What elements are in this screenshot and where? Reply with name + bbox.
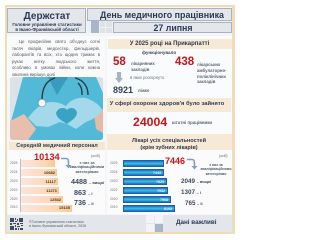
stat: staff: [133, 115, 212, 129]
header: Derzhstat logo box: [7, 8, 86, 33]
footer: [7, 215, 232, 232]
bar chart: 2022: [10, 188, 18, 192]
photo: medic making heart with hands: [10, 77, 103, 140]
date banner: [113, 22, 232, 33]
stat: 438 clinics: закладів: [197, 79, 215, 84]
heading: in 2025: У 2025 році на Прикарпатті: [130, 41, 209, 47]
panel: intro text: [7, 36, 105, 78]
copyright text: в Івано-Франківській області, 2026: [29, 224, 86, 228]
stat: second: 736 – ІІ: [74, 198, 94, 207]
heading: employment: У сфері охорони здоров'я було зайнято: [110, 101, 224, 107]
arrow: [187, 158, 198, 170]
bar chart: 7825: [156, 180, 164, 184]
text: department: Головне управління статистики: [12, 22, 82, 27]
heading: mid-level staff: Середній медичний персонал: [16, 142, 98, 148]
bar chart: 11117: [46, 178, 56, 184]
decorative grid squares bottom: [146, 215, 154, 222]
bar chart: 7443: [153, 171, 161, 175]
total number: 10134: [34, 152, 60, 162]
heading: mid-level staff: [9, 142, 105, 150]
stat: 438 clinics: [175, 56, 227, 84]
qualification note: [200, 162, 232, 176]
panel: facilities: [107, 36, 232, 136]
panel: doctors chart: [107, 150, 232, 214]
qualification note: категоріями: [206, 172, 226, 176]
stat: 58 hospitals: лікарняних: [131, 61, 155, 66]
outer frame: [5, 5, 235, 234]
stat: 438 clinics: 438: [175, 56, 194, 68]
text block: intro: особливо в умовах війни, коли кожна: [12, 65, 100, 70]
bar chart: 10682: [44, 170, 55, 174]
bar chart: 2025: [10, 161, 18, 165]
stat: beds: ліжко: [138, 88, 149, 92]
title: День медичного працівника: [100, 10, 224, 20]
stat: 438 clinics: поліклінічних: [197, 74, 226, 79]
text block: intro: [12, 39, 100, 77]
title banner: [87, 8, 232, 21]
year labels: 2010: [110, 205, 118, 209]
bar chart: 2023: [10, 179, 18, 183]
total number: 7446: [165, 156, 185, 166]
stat: first: 863 – І: [74, 188, 92, 197]
stat: 58 hospitals: 58: [113, 56, 126, 68]
qualification note: з них за: [209, 162, 223, 166]
stat: 58 hospitals: закладів: [131, 67, 149, 72]
year labels: [110, 161, 118, 209]
qualification note: категоріями: [75, 169, 99, 174]
subheading: функціонувало: [142, 50, 176, 55]
qualification note: кваліфікаційними: [200, 167, 232, 171]
bar chart: 2024: [10, 170, 18, 174]
bar chart: 8193: [164, 207, 172, 211]
stat: beds: 8921: [113, 84, 133, 94]
stat: 438 clinics: лікарських: [197, 62, 220, 67]
unit note: (осіб): [91, 154, 100, 158]
stat: second: 765 – ІІ: [185, 200, 203, 207]
heading: doctors: [107, 134, 232, 150]
decorative grid squares top: [87, 21, 232, 33]
year labels: 2024: [110, 170, 118, 174]
heading: in 2025: [108, 39, 232, 49]
icon: QR code: [10, 218, 23, 230]
arrow: [61, 158, 72, 168]
heading: doctors: (крім зубних лікарів): [140, 144, 198, 150]
stat: highest: 4488 – вищої: [71, 177, 104, 186]
stat: staff: штатні працівники: [172, 120, 212, 125]
unit note: (осіб): [219, 154, 228, 158]
year labels: 2020: [110, 197, 118, 201]
text block: intro: руках нитку людського життя,: [12, 58, 100, 64]
stat: highest: 2049 – вищої: [181, 178, 211, 185]
closing phrase: Дані важливі: [176, 219, 217, 226]
bar chart: 2020: [10, 197, 18, 201]
text block: intro: тисяч лікарів, медсестер, фельдшерів,: [12, 46, 100, 50]
bar chart: 11271: [46, 188, 57, 192]
bar chart: 15135: [59, 205, 70, 210]
stat: 438 clinics: амбулаторно-: [197, 68, 227, 73]
bar chart: 2010: [10, 205, 18, 209]
heading: doctors: Лікарі усіх спеціальностей: [132, 138, 206, 144]
copyright text: ©Головне управління статистики: [29, 220, 84, 224]
arrow down: [115, 72, 123, 83]
year labels: 2023: [110, 179, 118, 183]
stat: staff: 24004: [133, 115, 167, 129]
heading: employment: [107, 98, 231, 112]
year labels: 2022: [110, 188, 118, 192]
text block: intro: лаборантів та всіх, хто щодня тримає в: [12, 52, 100, 57]
stat: 58 hospitals: [113, 56, 155, 72]
note: in them: в яких розгорнуто: [130, 75, 164, 80]
heading: organisation: Держстат: [24, 11, 70, 22]
qualification note: кваліфікаційними: [70, 164, 104, 169]
stat: first: 1307 – І: [181, 189, 201, 196]
year labels: 2025: [110, 161, 118, 165]
panel: mid-level staff chart: [8, 150, 105, 214]
bar chart: [10, 159, 72, 212]
text: department: [12, 22, 82, 32]
qualification note: з них за: [79, 160, 95, 164]
text: department: в Івано-Франківській області: [15, 27, 79, 32]
copyright text: [29, 220, 86, 228]
text block: intro: хвилина вирішує долі: [12, 72, 55, 76]
date: 27 липня: [154, 23, 192, 33]
inner background: [7, 7, 232, 232]
bar chart: 7968: [160, 198, 168, 202]
bar chart: [123, 160, 175, 212]
text block: intro: Це професійне свято об'єднує сотні: [19, 39, 100, 44]
qualification note: [70, 160, 104, 174]
bar chart: 7932: [157, 189, 165, 193]
bar chart: 12542: [50, 196, 61, 202]
stat: beds: [113, 84, 150, 94]
